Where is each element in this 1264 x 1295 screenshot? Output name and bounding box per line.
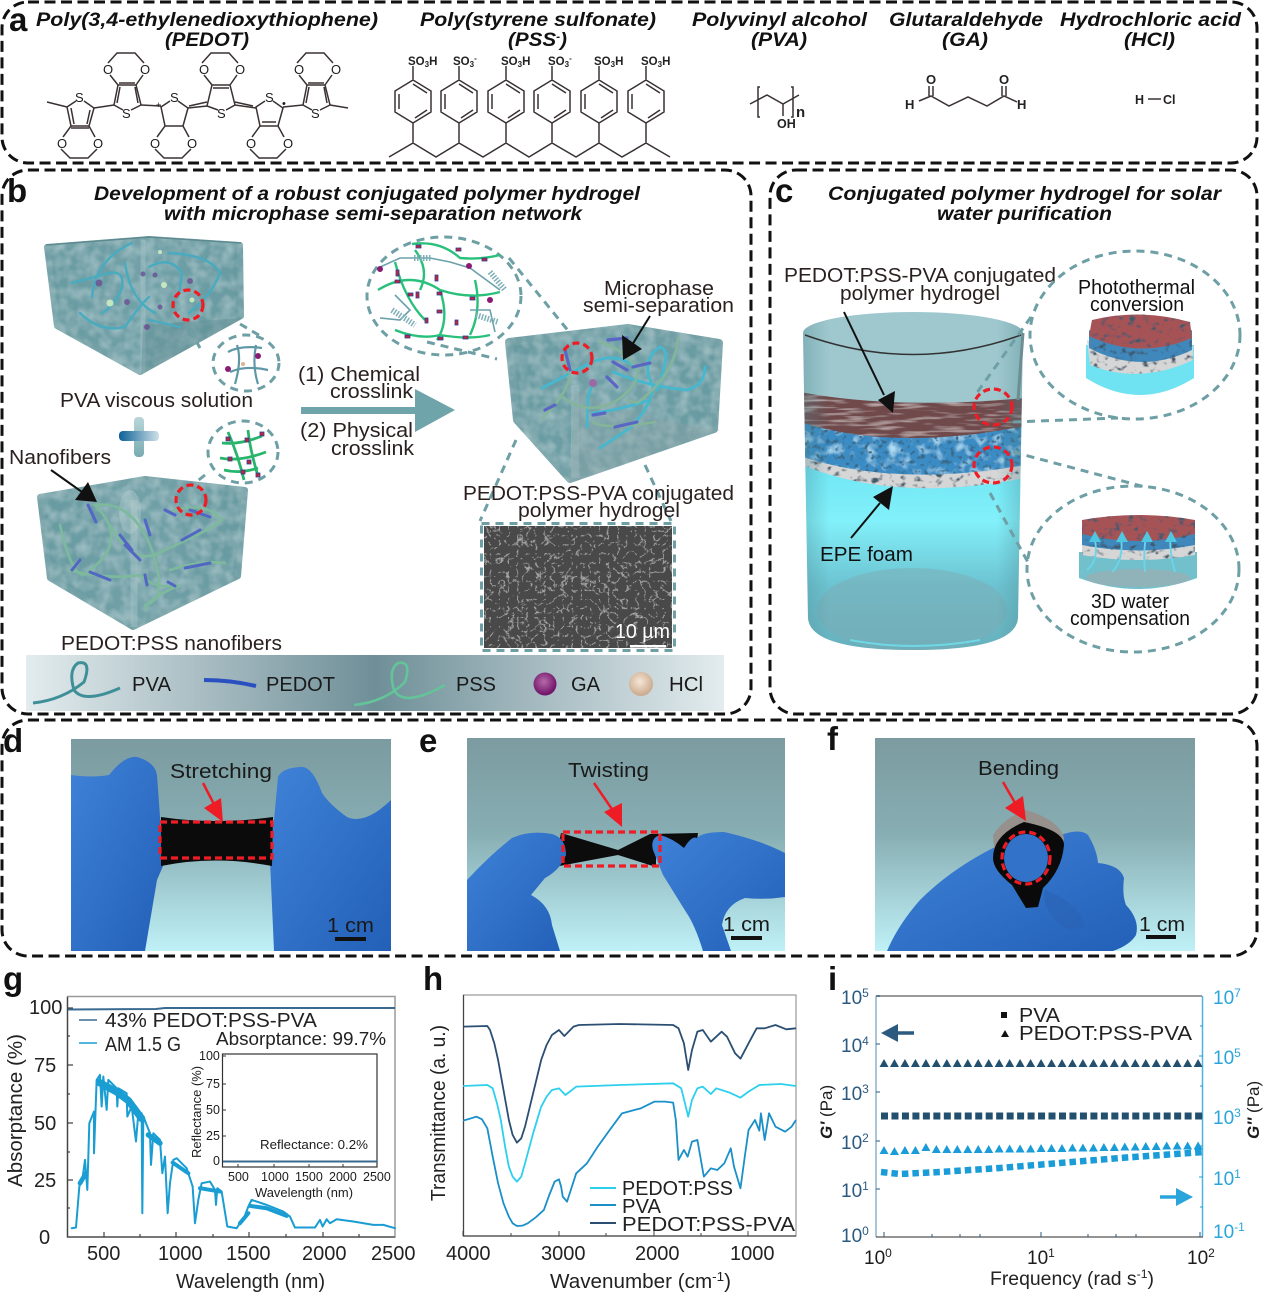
chemical structure: PSS: H xyxy=(615,56,623,68)
legend: HCl: HCl xyxy=(669,674,703,696)
panel label d: d xyxy=(3,722,23,759)
label: physical crosslink xyxy=(300,420,415,460)
chemical structure: PEDOT: S xyxy=(122,106,131,121)
chemical structure: PSS: SO xyxy=(548,56,565,68)
inset chart: reflectance: 0 xyxy=(213,1154,220,1168)
arrow: left axis xyxy=(881,1024,914,1042)
heading: HCl xyxy=(1060,10,1241,51)
heading: PVA: Polyvinyl alcohol xyxy=(692,10,868,31)
chemical structure: HCl: H xyxy=(1135,93,1144,107)
right axis labels: 10 xyxy=(1213,1048,1234,1069)
inset chart: reflectance xyxy=(189,1049,391,1200)
heading: panel b title: Development of a robust conjugated polymer hydrogel xyxy=(94,184,641,205)
heading: GA: Glutaraldehyde xyxy=(889,10,1043,31)
legend: PVA xyxy=(33,663,172,703)
right axis labels: 10 xyxy=(1213,988,1234,1009)
panel g: absorptance chart xyxy=(3,960,416,1293)
icon: plus xyxy=(119,417,159,457)
chemical structure: PEDOT: O xyxy=(93,136,103,151)
panel label g: g xyxy=(3,960,23,997)
label: conjugated polymer hydrogel: PEDOT:PSS-PVA conjugated xyxy=(463,483,734,505)
arrow: nanofibers xyxy=(51,470,97,502)
heading: HCl: (HCl) xyxy=(1124,30,1175,51)
legend: PEDOT: PEDOT xyxy=(266,674,335,696)
right axis labels: 3 xyxy=(1234,1106,1241,1120)
panel label a: a xyxy=(9,1,28,38)
chemical structure: PSS: SO xyxy=(408,56,425,68)
inset chart: reflectance: Reflectance: 0.2% xyxy=(260,1137,368,1152)
x axis labels: 1500 xyxy=(226,1243,270,1265)
inset chart: reflectance: 100 xyxy=(199,1049,220,1063)
left axis labels: 1 xyxy=(862,1179,869,1193)
left axis labels: 0 xyxy=(862,1224,869,1238)
arrow: hydrogel xyxy=(844,312,895,413)
heading: HCl: Hydrochloric acid xyxy=(1060,10,1241,31)
annotation: absorptance value: Absorptance: 99.7% xyxy=(216,1029,386,1049)
x axis labels: 3000 xyxy=(541,1243,586,1265)
label: chemical crosslink xyxy=(298,364,420,403)
label: Nanofibers: Nanofibers xyxy=(9,447,111,469)
right axis labels: 7 xyxy=(1234,986,1241,1000)
chemical structure: PSS: SO xyxy=(594,56,611,68)
chemical structure: PVA: n xyxy=(796,104,805,121)
arrow: microphase xyxy=(622,316,650,360)
chart frame and ticks xyxy=(876,996,1203,1237)
label: microphase semi-separation: semi-separation xyxy=(583,295,734,317)
chemical structure: PEDOT: O xyxy=(235,62,245,77)
legend: AM 1.5 G xyxy=(105,1034,181,1056)
chemical structure: GA: O xyxy=(926,72,936,87)
heading: PEDOT: Poly(3,4-ethylenedioxythiophene) xyxy=(36,10,378,31)
left axis labels: 10 xyxy=(841,1133,862,1154)
right axis labels xyxy=(1213,986,1245,1243)
label: microphase semi-separation: Microphase xyxy=(604,278,714,300)
beaker with hydrogel layers xyxy=(800,310,1030,652)
chemical structure: PSS: 3 xyxy=(611,60,616,69)
label: PVA viscous solution: PVA viscous solution xyxy=(60,390,253,412)
chart frame and ticks xyxy=(67,996,395,1237)
left axis labels: 5 xyxy=(862,986,869,1000)
left axis labels: 10 xyxy=(841,1181,862,1202)
callout: PVA network detail xyxy=(190,324,279,391)
x axis title: ) xyxy=(1148,1269,1154,1290)
label: microphase semi-separation xyxy=(583,278,734,317)
legend: PSS: PSS xyxy=(456,674,496,696)
panel i: rheology chart xyxy=(817,960,1263,1290)
chemical structure: PSS: H xyxy=(429,56,437,68)
chemical structure: PSS: SO xyxy=(641,56,658,68)
heading: GA: (GA) xyxy=(942,30,988,51)
legend xyxy=(590,1178,796,1236)
cube: PEDOT:PSS nanofibers xyxy=(40,479,245,627)
legend xyxy=(79,1010,318,1056)
inset chart: reflectance: 2000 xyxy=(329,1170,357,1184)
chemical structure: PEDOT: + xyxy=(156,100,161,110)
y axis title: Transmittance (a. u.) xyxy=(428,1025,450,1201)
x axis title: Frequency (rad s xyxy=(990,1269,1134,1290)
label: conjugated polymer hydrogel xyxy=(784,265,1056,305)
chemical structure: PSS: 3 xyxy=(658,60,663,69)
chemical structure: PEDOT: O xyxy=(246,136,256,151)
photo e: twisting: Twisting xyxy=(568,760,649,782)
label: conjugated polymer hydrogel: PEDOT:PSS-PVA conjugated xyxy=(784,265,1056,287)
legend: 43% PEDOT:PSS-PVA xyxy=(105,1010,318,1032)
series: PVA G' squares xyxy=(881,1112,1203,1120)
panel label e: e xyxy=(419,722,437,759)
arrow: EPE foam xyxy=(851,486,893,538)
callout: photothermal conversion xyxy=(1030,251,1240,419)
left axis labels: 10 xyxy=(841,1084,862,1105)
y axis labels: 50 xyxy=(34,1113,56,1135)
x axis title: -1 xyxy=(712,1269,724,1284)
x axis title: Wavelength (nm) xyxy=(176,1271,325,1293)
x axis labels: 500 xyxy=(87,1243,120,1265)
inset chart: reflectance: 25 xyxy=(206,1129,220,1143)
callout: PEDOT:PSS network detail xyxy=(190,421,278,487)
chemical structure: PSS: 3 xyxy=(518,60,523,69)
chemical structure: HCl: Cl xyxy=(1163,93,1176,107)
cube: PVA viscous solution xyxy=(46,237,243,375)
heading: PEDOT: (PEDOT) xyxy=(165,30,249,51)
chemical structure: GA xyxy=(905,72,1026,112)
x axis labels: 2000 xyxy=(635,1243,680,1265)
label: EPE foam: EPE foam xyxy=(820,544,913,566)
red highlight circle: nanofiber cube xyxy=(176,485,206,515)
line: PEDOT:PSS-PVA spectrum xyxy=(463,1024,796,1143)
inset chart: reflectance: 500 xyxy=(228,1170,249,1184)
heading: PVA xyxy=(692,10,868,51)
x axis labels: 10 xyxy=(864,1248,885,1269)
callout: photothermal conversion: Photothermal xyxy=(1078,277,1195,299)
series: PEDOT:PSS-PVA G' triangles xyxy=(880,1059,1203,1067)
panel b: hydrogel development xyxy=(2,170,751,714)
chemical structure: PVA xyxy=(750,87,805,131)
panel label h: h xyxy=(423,960,443,997)
chemical structure: PEDOT: S xyxy=(75,90,84,105)
chemical structure: HCl xyxy=(1135,93,1176,107)
legend: PVA: PVA xyxy=(132,674,172,696)
x axis labels xyxy=(446,1243,774,1265)
y axis labels xyxy=(29,997,62,1249)
chemical structure: GA: H xyxy=(1017,97,1026,112)
left axis labels: 4 xyxy=(862,1034,869,1048)
y axis title right: G'' (Pa) xyxy=(1244,1081,1263,1139)
right axis labels: -1 xyxy=(1234,1220,1245,1234)
image: SEM micrograph: 10 µm xyxy=(615,621,670,643)
x axis labels: 10 xyxy=(1027,1248,1048,1269)
heading: PSS: Poly(styrene sulfonate) xyxy=(420,10,656,31)
line: absorptance xyxy=(68,1008,395,1010)
chemical structure: PEDOT: O xyxy=(294,62,304,77)
chemical structure: PEDOT: O xyxy=(57,136,67,151)
legend bar xyxy=(26,655,724,711)
chemical structure: GA: O xyxy=(999,72,1009,87)
inset chart: reflectance: Wavelength (nm) xyxy=(255,1185,353,1200)
inset chart: reflectance: 1500 xyxy=(295,1170,323,1184)
callout connectors: SEM xyxy=(480,440,671,521)
series: PVA G'' squares xyxy=(881,1152,1203,1174)
y axis labels: 0 xyxy=(39,1227,50,1249)
x axis title: Wavenumber (cm xyxy=(550,1271,707,1293)
chemical structure: PSS: - xyxy=(569,54,572,63)
right axis labels: 5 xyxy=(1234,1046,1241,1060)
inset chart: reflectance: 50 xyxy=(206,1103,220,1117)
chemical structure: PVA: OH xyxy=(777,117,796,131)
heading: panel b title xyxy=(94,184,641,225)
inset chart: reflectance: Reflectance (%) xyxy=(189,1066,204,1158)
panel label i: i xyxy=(828,960,837,997)
chart frame xyxy=(463,995,796,1236)
label: physical crosslink: crosslink xyxy=(331,438,415,460)
red highlight circle: PVA cube xyxy=(173,290,203,320)
image: SEM micrograph xyxy=(482,524,674,650)
x axis title: -1 xyxy=(1137,1267,1148,1281)
right axis labels: 1 xyxy=(1234,1167,1241,1181)
chemical structure: PSS: H xyxy=(522,56,530,68)
inset chart: reflectance: 75 xyxy=(206,1077,220,1091)
y axis labels: 100 xyxy=(29,997,62,1019)
left axis labels: 3 xyxy=(862,1082,869,1096)
photo f: bending xyxy=(875,738,1195,951)
callout connectors xyxy=(976,317,1145,566)
photo f: bending: 1 cm xyxy=(1139,914,1185,936)
chemical structure: GA: H xyxy=(905,97,914,112)
chemical structure: PEDOT: O xyxy=(199,62,209,77)
legend: GA: GA xyxy=(571,674,601,696)
callout: microphase network detail xyxy=(367,237,570,359)
x axis labels: 2000 xyxy=(302,1243,346,1265)
panel label b: b xyxy=(7,172,27,209)
chemical structure: PEDOT: O xyxy=(150,136,160,151)
heading: PSS xyxy=(420,10,656,51)
red highlight circles xyxy=(974,389,1012,483)
right axis labels: 10 xyxy=(1213,1169,1234,1190)
legend: PEDOT:PSS xyxy=(622,1178,733,1200)
x axis labels: 2 xyxy=(1208,1246,1215,1260)
chemical structure: PSS: 3 xyxy=(425,60,430,69)
left axis labels: 10 xyxy=(841,1226,862,1247)
photo e: twisting xyxy=(467,738,785,951)
legend: PEDOT:PSS-PVA xyxy=(1019,1023,1193,1045)
legend: GA xyxy=(534,672,601,696)
legend: PEDOT xyxy=(204,674,335,696)
panel a: chemical structures xyxy=(2,1,1257,163)
panel label c: c xyxy=(775,172,793,209)
left axis labels: 10 xyxy=(841,988,862,1009)
line: AM 1.5 G spectrum xyxy=(72,1075,395,1228)
panel h: FTIR chart xyxy=(423,960,796,1293)
label: conjugated polymer hydrogel xyxy=(463,483,734,522)
legend xyxy=(1001,1005,1193,1045)
x axis labels xyxy=(864,1246,1215,1269)
x axis labels: 0 xyxy=(885,1246,892,1260)
callout: 3D water compensation: 3D water xyxy=(1091,591,1169,613)
chemical structure: PEDOT: S xyxy=(265,90,274,105)
legend: PSS xyxy=(354,663,496,705)
x axis labels: 10 xyxy=(1187,1248,1208,1269)
line: PEDOT:PSS spectrum xyxy=(463,1083,796,1182)
heading: GA xyxy=(889,10,1043,51)
y axis labels: 25 xyxy=(34,1170,56,1192)
chemical structure: PEDOT: S xyxy=(311,106,320,121)
heading: PSS: (PSS xyxy=(508,30,552,51)
label: conjugated polymer hydrogel: polymer hydrogel xyxy=(518,500,680,522)
panel d-f: mechanical photos xyxy=(2,720,1257,956)
chemical structure: PSS: 3 xyxy=(470,60,475,69)
photo d: stretching xyxy=(71,739,391,951)
label: conjugated polymer hydrogel: polymer hydrogel xyxy=(840,283,1000,305)
legend: PEDOT:PSS-PVA xyxy=(622,1214,796,1236)
chemical structure: PSS: H xyxy=(662,56,670,68)
photo d: stretching: 1 cm xyxy=(327,915,374,937)
chemical structure: PEDOT: O xyxy=(331,62,341,77)
chemical structure: PEDOT: O xyxy=(140,62,150,77)
x axis labels: 1000 xyxy=(730,1243,774,1265)
callout: 3D water compensation xyxy=(1027,486,1239,652)
x axis labels: 1000 xyxy=(158,1243,202,1265)
legend: PVA xyxy=(1019,1005,1061,1027)
x axis labels: 4000 xyxy=(446,1243,490,1265)
legend: HCl xyxy=(629,672,703,696)
left axis labels xyxy=(841,986,869,1247)
chemical structure: PSS: SO xyxy=(501,56,518,68)
line: PVA spectrum xyxy=(463,1102,796,1226)
chemical structure: PSS: 3 xyxy=(565,60,570,69)
panel c: solar water purification xyxy=(770,170,1257,714)
red highlight circle: hydrogel cube xyxy=(562,343,592,373)
photo e: twisting: 1 cm xyxy=(723,914,770,936)
heading: panel c title: Conjugated polymer hydrogel for solar xyxy=(828,184,1223,205)
heading: panel b title: with microphase semi-separation network xyxy=(164,204,584,225)
chemical structure: PEDOT xyxy=(47,53,348,158)
inset chart: reflectance: 1000 xyxy=(261,1170,289,1184)
x axis labels: 1 xyxy=(1048,1246,1055,1260)
label: chemical crosslink: (1) Chemical xyxy=(298,364,420,386)
chemical structure: PEDOT: S xyxy=(217,106,226,121)
chemical structure: PEDOT: S xyxy=(170,90,179,105)
left axis labels: 2 xyxy=(862,1131,869,1145)
x axis labels xyxy=(87,1243,416,1265)
legend: PVA xyxy=(622,1196,662,1218)
heading: panel c title xyxy=(828,184,1223,225)
series: PEDOT:PSS-PVA G'' triangles xyxy=(880,1142,1203,1155)
y axis title: Absorptance (%) xyxy=(5,1034,27,1187)
chemical structure: PEDOT: O xyxy=(187,136,197,151)
arrow: right axis xyxy=(1160,1188,1193,1206)
callout: 3D water compensation: compensation xyxy=(1070,608,1190,630)
chemical structure: PEDOT: O xyxy=(103,62,113,77)
right axis labels: 10 xyxy=(1213,1108,1234,1129)
inset chart: reflectance: 2500 xyxy=(363,1170,391,1184)
cube: PEDOT:PSS-PVA hydrogel xyxy=(509,328,720,483)
heading: panel c title: water purification xyxy=(937,204,1112,225)
chemical structure: PSS: - xyxy=(474,54,477,63)
label: chemical crosslink: crosslink xyxy=(330,381,414,403)
heading: PSS: ) xyxy=(558,30,567,51)
chemical structure: PSS xyxy=(389,54,670,157)
label: physical crosslink: (2) Physical xyxy=(300,420,413,442)
photo f: bending: Bending xyxy=(978,758,1059,780)
heading: PVA: (PVA) xyxy=(751,30,807,51)
panel label f: f xyxy=(827,720,839,757)
left axis labels: 10 xyxy=(841,1036,862,1057)
y axis title left: G' (Pa) xyxy=(817,1085,836,1139)
y axis labels: 75 xyxy=(34,1055,56,1077)
chemical structure: PEDOT: • xyxy=(282,98,286,110)
chemical structure: PSS: SO xyxy=(453,56,470,68)
photo d: stretching: Stretching xyxy=(170,761,272,783)
heading: PSS: - xyxy=(556,31,560,43)
chemical structure: PEDOT: O xyxy=(283,136,293,151)
callout: photothermal conversion: conversion xyxy=(1090,294,1184,316)
right axis labels: 10 xyxy=(1213,1222,1234,1243)
label: PEDOT:PSS nanofibers: PEDOT:PSS nanofibers xyxy=(61,633,282,655)
x axis title: ) xyxy=(724,1271,731,1293)
x axis labels: 2500 xyxy=(371,1243,416,1265)
heading: PEDOT xyxy=(36,10,378,51)
arrow: crosslinking process xyxy=(301,389,455,432)
